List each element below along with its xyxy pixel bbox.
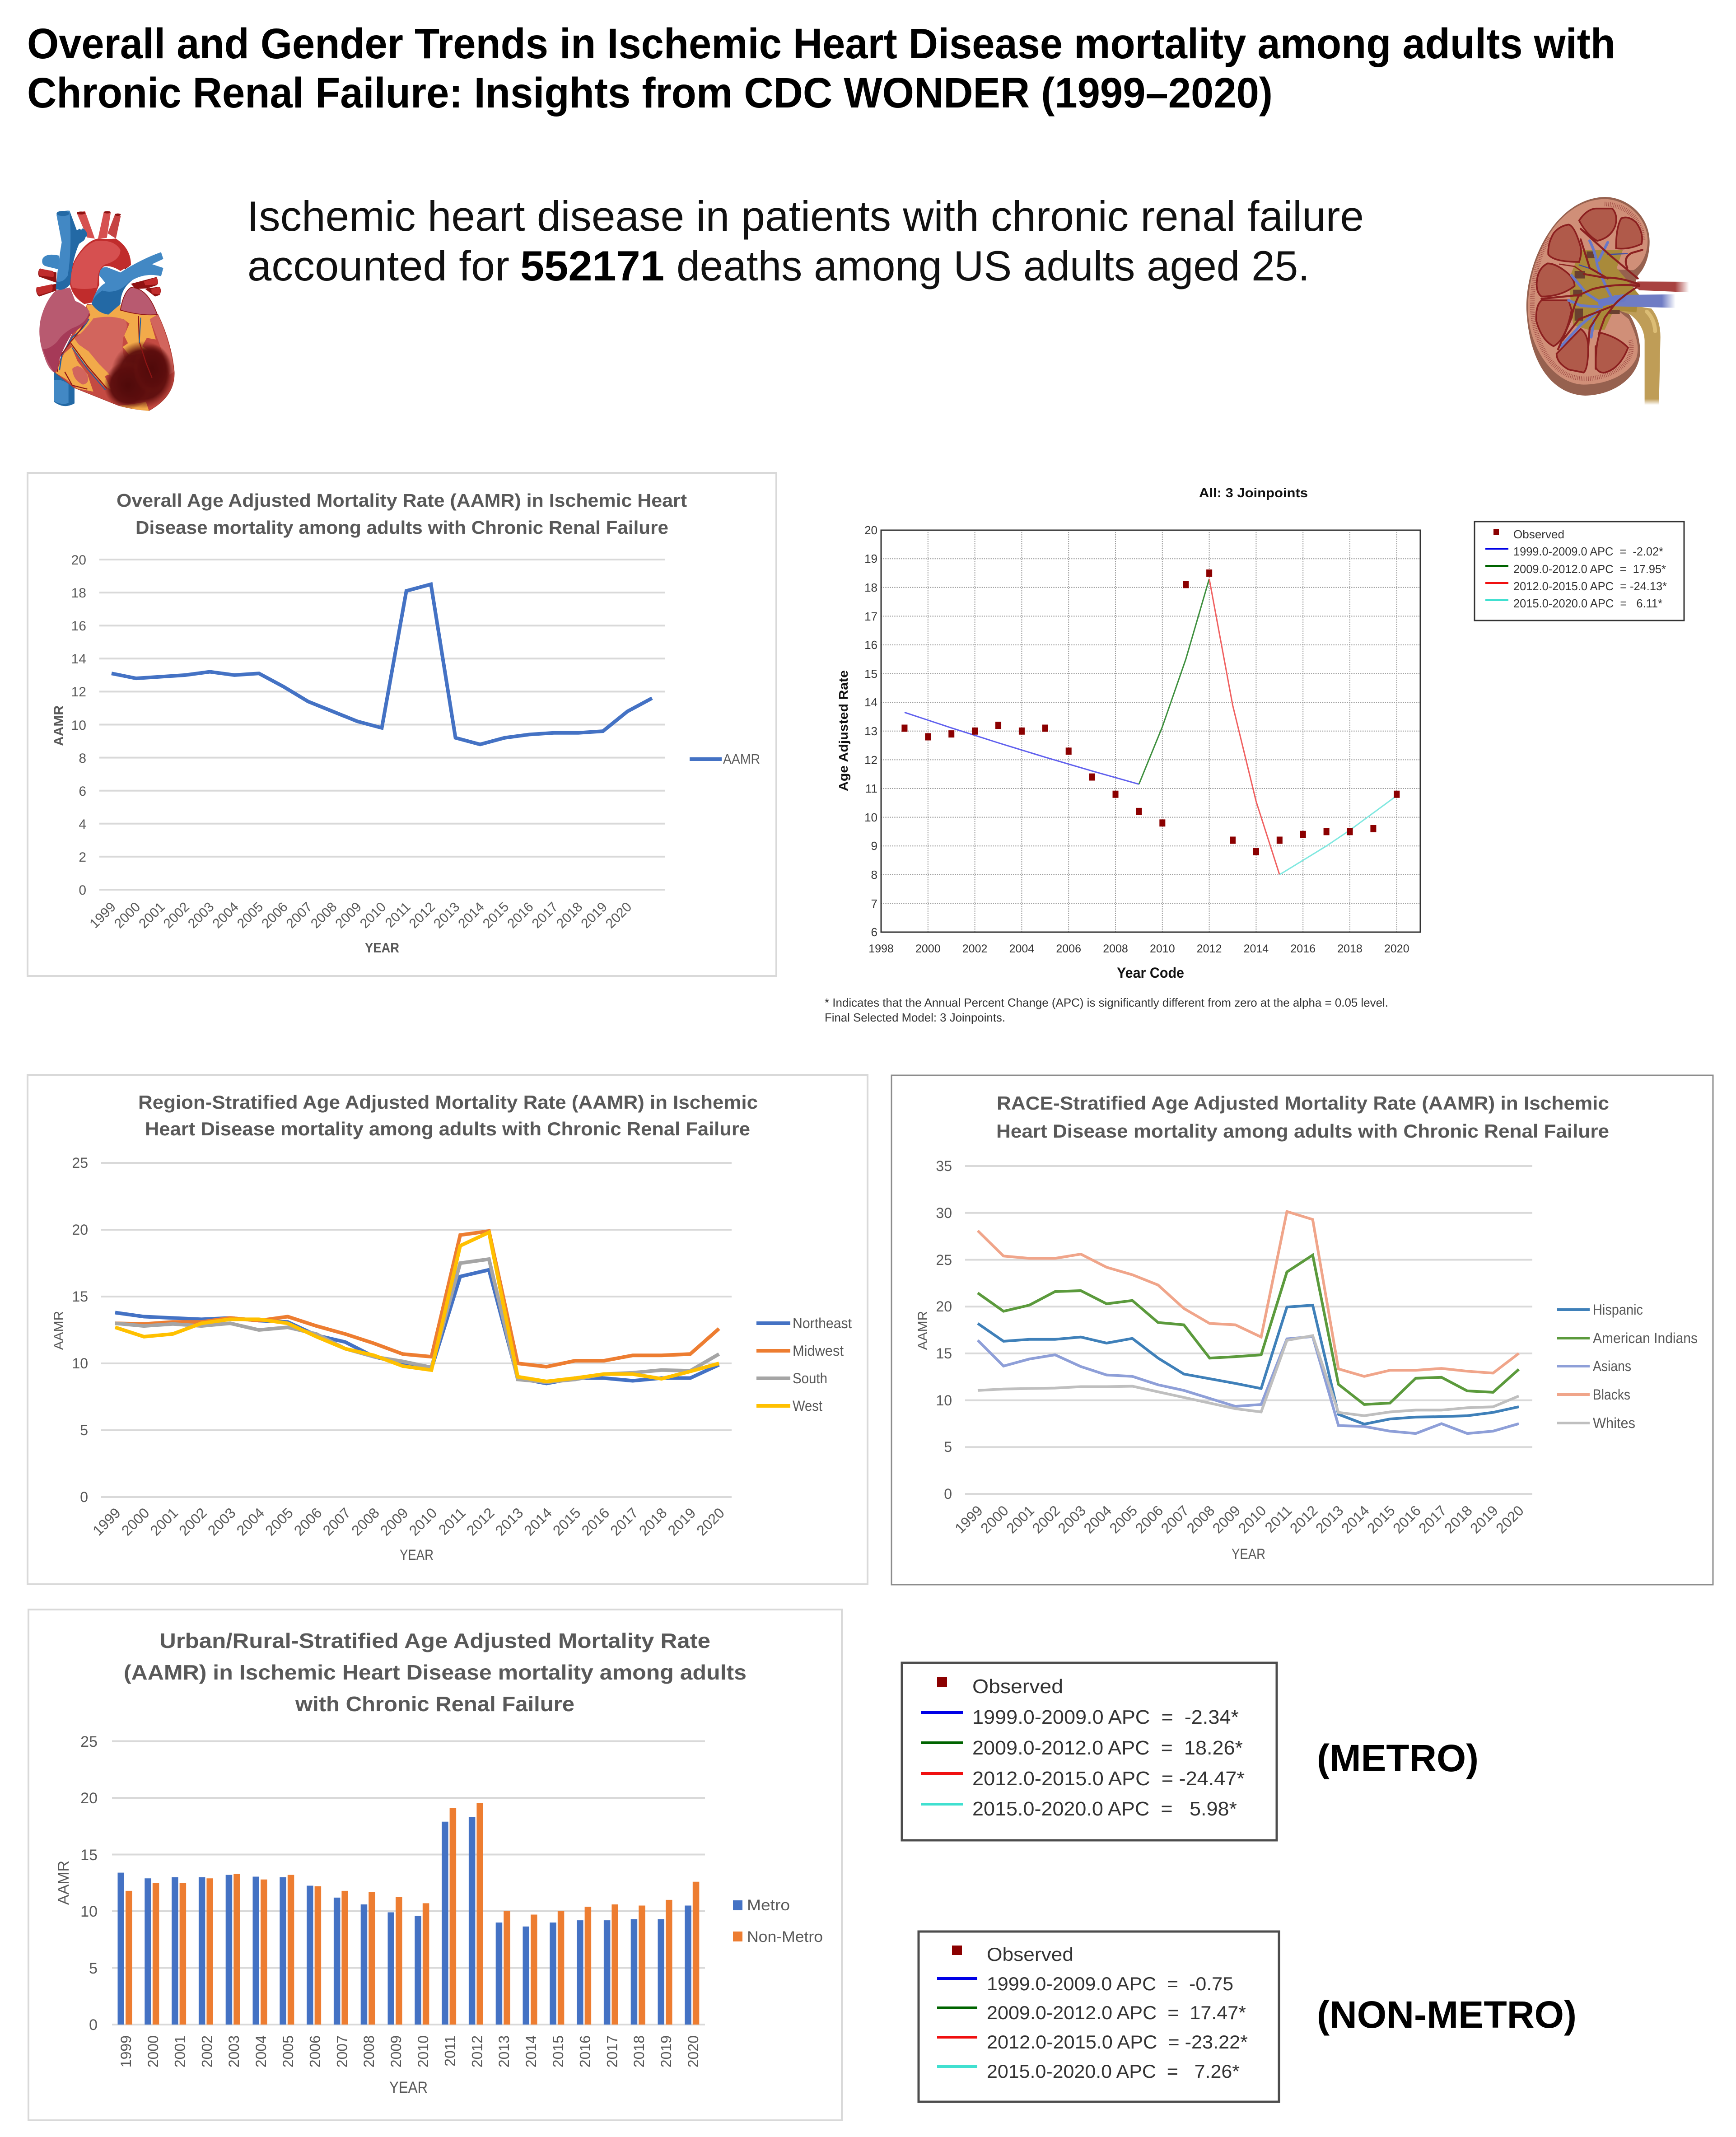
legend: AAMR: [723, 751, 760, 767]
line: AAMR: [112, 584, 652, 744]
panel: race-stratified line chart: [891, 1075, 1713, 1585]
x axis year labels: 1999: [118, 2035, 134, 2067]
icon: kidney cross-section: [1526, 197, 1689, 405]
panel: joinpoint regression chart: [825, 486, 1684, 1024]
x axis title: YEAR: [400, 1547, 434, 1563]
x axis year labels: 2008: [308, 900, 340, 931]
legend: overall APC: [1475, 522, 1684, 621]
x axis year labels: 2001: [136, 900, 168, 931]
y axis labels: 11: [865, 782, 877, 795]
y axis labels: 15: [80, 1847, 98, 1864]
y axis labels: 5: [80, 1422, 88, 1438]
x axis year labels: [118, 2035, 701, 2067]
x axis year labels: [89, 1504, 728, 1539]
x axis year labels: 2011: [383, 900, 414, 931]
x axis year labels: 2006: [259, 900, 291, 931]
x axis year labels: 2005: [280, 2035, 296, 2067]
plot grid: [881, 530, 1420, 932]
y axis title: AAMR: [915, 1311, 930, 1350]
x axis labels: 2004: [1009, 943, 1034, 955]
x axis year labels: 2013: [492, 1504, 526, 1539]
y axis labels: [80, 1733, 98, 2034]
legend: metro APC: Observed: [972, 1675, 1063, 1698]
x axis year labels: 2003: [185, 900, 217, 931]
x axis year labels: 2001: [172, 2035, 188, 2067]
y axis title: AAMR: [55, 1861, 72, 1905]
y axis labels: 6: [871, 925, 877, 939]
x axis year labels: 2007: [320, 1504, 354, 1539]
x axis labels: 2006: [1056, 943, 1081, 955]
legend: South: [793, 1370, 827, 1386]
x axis year labels: 2018: [1441, 1502, 1475, 1536]
x axis year labels: 2004: [253, 2035, 269, 2067]
x axis labels: 2020: [1384, 943, 1409, 955]
grid lines: [112, 1741, 705, 2025]
x axis labels: 2016: [1290, 943, 1316, 955]
chart title: Heart Disease mortality among adults with Chronic Renal Failure: [145, 1118, 750, 1139]
y axis labels: 5: [944, 1439, 952, 1455]
chart title: [117, 490, 687, 538]
chart title: RACE-Stratified Age Adjusted Mortality Rate (AAMR) in Ischemic: [997, 1092, 1609, 1114]
y axis labels: 0: [80, 1489, 88, 1505]
x axis year labels: 2017: [1415, 1502, 1450, 1536]
legend: Blacks: [1593, 1386, 1630, 1403]
y axis labels: 20: [864, 523, 877, 537]
x axis year labels: 2010: [406, 1504, 440, 1539]
x axis year labels: 2001: [1003, 1502, 1037, 1536]
x axis year labels: 1999: [952, 1502, 986, 1536]
x axis year labels: 2015: [550, 2035, 566, 2067]
x axis labels: 2000: [915, 943, 941, 955]
x axis year labels: 2014: [521, 1504, 555, 1539]
footnote: [825, 996, 1388, 1024]
legend: Asians: [1593, 1358, 1631, 1374]
x axis year labels: 2002: [161, 900, 192, 931]
y axis labels: 5: [89, 1960, 98, 1977]
x axis year labels: 2019: [665, 1504, 699, 1539]
lines: Hispanic, American Indians, Asians, Blacks, Whites: [978, 1212, 1519, 1433]
x axis year labels: 2012: [469, 2035, 485, 2067]
x axis year labels: 2020: [603, 900, 635, 931]
x axis year labels: 2011: [435, 1504, 469, 1538]
chart title: [124, 1629, 747, 1716]
summary text block: Ischemic heart disease in patients with chronic renal failure: [247, 192, 1364, 240]
x axis year labels: 2005: [234, 900, 266, 931]
y axis labels: 0: [944, 1486, 952, 1502]
legend: metro APC: 2015.0-2020.0 APC = 5.98*: [972, 1798, 1237, 1820]
y axis labels: 15: [72, 1288, 88, 1305]
x axis year labels: 2003: [205, 1504, 239, 1539]
x axis year labels: 2007: [1158, 1502, 1192, 1536]
x axis title: Year Code: [1117, 965, 1184, 981]
y axis labels: [936, 1158, 952, 1502]
x axis year labels: 2004: [233, 1504, 267, 1539]
grid lines: [101, 1163, 732, 1497]
y axis labels: 14: [864, 695, 877, 709]
x axis year labels: 2014: [455, 900, 487, 931]
x axis year labels: 2016: [504, 900, 537, 931]
lines: Northeast, Midwest, South, West: [115, 1231, 719, 1383]
legend: overall APC: 2012.0-2015.0 APC = -24.13*: [1513, 579, 1667, 593]
x axis year labels: 2013: [496, 2035, 512, 2067]
y axis title: AAMR: [51, 1311, 66, 1350]
chart title: Overall Age Adjusted Mortality Rate (AAMR) in Ischemic Heart: [117, 490, 687, 511]
x axis year labels: 2000: [118, 1504, 153, 1539]
y axis labels: 12: [864, 753, 877, 767]
y axis labels: 8: [871, 868, 877, 882]
bars: Metro and Non-Metro: [117, 1803, 699, 2025]
y axis labels: 9: [871, 839, 877, 853]
x axis year labels: 2009: [377, 1504, 411, 1539]
x axis year labels: 2001: [147, 1504, 181, 1539]
legend: Northeast: [793, 1315, 852, 1331]
y axis labels: 30: [936, 1205, 952, 1221]
x axis year labels: 1999: [89, 1504, 124, 1539]
x axis year labels: 2006: [307, 2035, 323, 2067]
y axis labels: 16: [71, 619, 86, 634]
title: Overall and Gender Trends in Ischemic Heart Disease mortality among adults with: [27, 20, 1615, 68]
y axis labels: 16: [864, 638, 877, 652]
x axis year labels: 2016: [1390, 1502, 1424, 1536]
x axis year labels: 2009: [332, 900, 364, 931]
x axis year labels: 2012: [1287, 1502, 1321, 1536]
legend: Non-Metro: [747, 1928, 823, 1946]
x axis title: YEAR: [389, 2079, 428, 2096]
legend: Midwest: [793, 1343, 844, 1359]
x axis year labels: 2000: [977, 1502, 1012, 1536]
x axis year labels: 2017: [604, 2035, 620, 2067]
x axis year labels: 2017: [607, 1504, 641, 1539]
x axis year labels: 1999: [87, 900, 119, 931]
x axis year labels: 2018: [554, 900, 586, 931]
legend: Whites: [1593, 1415, 1635, 1431]
legend: overall APC: Observed: [1513, 527, 1564, 541]
y axis labels: 12: [71, 685, 86, 700]
y axis labels: 15: [936, 1345, 952, 1362]
x axis year labels: 2018: [631, 2035, 647, 2067]
footnote: * Indicates that the Annual Percent Change (APC) is significantly different from zero at the alpha = 0.05 level.: [825, 996, 1388, 1009]
panel: overall AAMR line chart: [28, 473, 776, 976]
chart title: Disease mortality among adults with Chronic Renal Failure: [135, 517, 668, 538]
x axis year labels: 2000: [112, 900, 143, 931]
x axis year labels: 2017: [529, 900, 561, 931]
panel: region-stratified line chart: [28, 1075, 868, 1584]
x axis labels: 2018: [1337, 943, 1363, 955]
x axis year labels: 2014: [523, 2035, 539, 2067]
legend: non-metro APC: 2015.0-2020.0 APC = 7.26*: [987, 2061, 1240, 2082]
y axis labels: 20: [80, 1790, 98, 1807]
legend: overall APC: 2009.0-2012.0 APC = 17.95*: [1513, 562, 1666, 576]
x axis year labels: 2009: [388, 2035, 404, 2067]
x axis year labels: 2009: [1209, 1502, 1243, 1536]
x axis year labels: 2013: [431, 900, 463, 931]
legend: Hispanic: [1593, 1302, 1643, 1318]
chart title: with Chronic Renal Failure: [295, 1692, 574, 1716]
legend: non-metro APC: 2009.0-2012.0 APC = 17.47*: [987, 2002, 1246, 2023]
y axis labels: 6: [79, 784, 86, 799]
legend: [756, 1315, 852, 1414]
y axis labels: [71, 553, 86, 898]
legend: West: [793, 1398, 822, 1414]
chart title: [996, 1092, 1609, 1142]
y axis labels: 25: [80, 1733, 98, 1750]
x axis year labels: 2005: [262, 1504, 296, 1539]
y axis labels: 15: [864, 667, 877, 681]
x axis year labels: 2008: [361, 2035, 377, 2067]
grid lines: [99, 560, 665, 890]
x axis year labels: 2008: [1184, 1502, 1218, 1536]
x axis title: YEAR: [365, 940, 399, 956]
x axis year labels: 2006: [291, 1504, 325, 1539]
label: NON-METRO: (NON-METRO): [1317, 1993, 1577, 2036]
x axis labels: 1998: [868, 943, 894, 955]
y axis labels: 10: [936, 1392, 952, 1409]
y axis labels: 18: [71, 586, 86, 601]
chart title: [138, 1092, 758, 1139]
x axis year labels: 2016: [579, 1504, 612, 1539]
x axis year labels: 2004: [1080, 1502, 1115, 1536]
chart title: Heart Disease mortality among adults with Chronic Renal Failure: [996, 1120, 1609, 1142]
summary text block: accounted for: [247, 242, 509, 289]
x axis year labels: 2020: [693, 1504, 728, 1539]
y axis labels: 19: [864, 552, 877, 565]
x axis labels: 2008: [1103, 943, 1128, 955]
legend: American Indians: [1593, 1330, 1698, 1346]
y axis labels: 4: [79, 817, 86, 832]
y axis title: AAMR: [51, 705, 66, 746]
x axis year labels: 2005: [1106, 1502, 1140, 1536]
x axis year labels: 2015: [1364, 1502, 1398, 1536]
x axis year labels: 2019: [658, 2035, 674, 2067]
y axis labels: 25: [936, 1252, 952, 1268]
icon: heart with infarct: [36, 210, 175, 411]
x axis year labels: 2010: [1235, 1502, 1269, 1536]
title: [27, 20, 1615, 117]
x axis year labels: 2003: [1055, 1502, 1089, 1536]
y axis labels: 13: [864, 724, 877, 738]
y axis title: Age Adjusted Rate: [836, 670, 850, 791]
x axis year labels: 2012: [463, 1504, 498, 1539]
grid lines: [965, 1166, 1532, 1494]
y axis labels: 20: [936, 1298, 952, 1315]
legend: metro APC: 2009.0-2012.0 APC = 18.26*: [972, 1737, 1243, 1759]
y axis labels: 17: [864, 610, 877, 623]
summary text block: deaths among US adults aged 25.: [677, 242, 1310, 289]
y axis labels: 0: [89, 2016, 98, 2034]
chart title: All: 3 Joinpoints: [1199, 486, 1308, 500]
x axis year labels: 2013: [1312, 1502, 1347, 1536]
y axis labels: 35: [936, 1158, 952, 1174]
y axis labels: 0: [79, 883, 86, 898]
x axis labels: 2010: [1150, 943, 1175, 955]
x axis year labels: 2011: [1261, 1502, 1295, 1536]
legend: Metro: [747, 1897, 790, 1914]
legend: metro APC: 1999.0-2009.0 APC = -2.34*: [972, 1706, 1239, 1728]
x axis year labels: 2007: [284, 900, 315, 931]
x axis year labels: 2010: [357, 900, 389, 931]
x axis year labels: 2019: [578, 900, 610, 931]
legend: metro APC: [902, 1663, 1277, 1840]
label: METRO: (METRO): [1317, 1737, 1479, 1779]
x axis year labels: 2002: [199, 2035, 215, 2067]
summary text block: 552171: [520, 242, 664, 289]
x axis year labels: 2020: [1493, 1502, 1527, 1536]
y axis labels: 25: [72, 1155, 88, 1171]
legend: non-metro APC: Observed: [987, 1944, 1073, 1965]
legend: non-metro APC: 2012.0-2015.0 APC = -23.22*: [987, 2031, 1248, 2053]
x axis year labels: 2015: [480, 900, 512, 931]
y axis labels: 20: [71, 553, 86, 568]
title: Chronic Renal Failure: Insights from CDC WONDER (1999–2020): [27, 69, 1273, 117]
chart title: Region-Stratified Age Adjusted Mortality Rate (AAMR) in Ischemic: [138, 1092, 758, 1113]
chart title: (AAMR) in Ischemic Heart Disease mortality among adults: [124, 1661, 747, 1684]
plot frame: [881, 530, 1420, 932]
legend: overall APC: 2015.0-2020.0 APC = 6.11*: [1513, 597, 1662, 610]
y axis labels: 10: [80, 1903, 98, 1920]
x axis year labels: 2007: [334, 2035, 350, 2067]
y axis labels: [72, 1155, 88, 1505]
x axis year labels: 2018: [636, 1504, 670, 1539]
x axis labels: 2012: [1197, 943, 1222, 955]
x axis labels: [868, 943, 1409, 955]
x axis year labels: 2015: [550, 1504, 584, 1539]
y axis labels: 20: [72, 1222, 88, 1238]
x axis year labels: 2003: [226, 2035, 242, 2067]
legend: overall APC: 1999.0-2009.0 APC = -2.02*: [1513, 545, 1663, 558]
legend: non-metro APC: [919, 1932, 1279, 2102]
x axis year labels: 2002: [1029, 1502, 1063, 1536]
legend: [733, 1897, 823, 1946]
y axis labels: 8: [79, 751, 86, 766]
y axis labels: 2: [79, 850, 86, 865]
footnote: Final Selected Model: 3 Joinpoints.: [825, 1011, 1005, 1024]
x axis year labels: 2011: [442, 2035, 458, 2067]
summary text block: [247, 192, 1364, 289]
x axis year labels: 2012: [406, 900, 438, 931]
y axis labels: 14: [71, 652, 86, 667]
panel: urban/rural bar chart: [28, 1610, 842, 2120]
x axis year labels: 2019: [1467, 1502, 1501, 1536]
x axis labels: 2014: [1244, 943, 1269, 955]
x axis year labels: 2008: [348, 1504, 383, 1539]
y axis labels: [864, 523, 877, 939]
x axis title: YEAR: [1232, 1546, 1265, 1562]
legend: [1557, 1302, 1698, 1431]
x axis year labels: 2004: [210, 900, 242, 931]
legend: non-metro APC: 1999.0-2009.0 APC = -0.75: [987, 1973, 1233, 1994]
legend: metro APC: 2012.0-2015.0 APC = -24.47*: [972, 1768, 1245, 1790]
y axis labels: 18: [864, 581, 877, 594]
y axis labels: 10: [864, 811, 877, 824]
x axis year labels: 2016: [577, 2035, 593, 2067]
x axis year labels: [952, 1502, 1527, 1536]
x axis year labels: 2000: [145, 2035, 161, 2067]
x axis year labels: 2014: [1338, 1502, 1372, 1536]
x axis year labels: [87, 900, 635, 931]
x axis year labels: 2010: [415, 2035, 431, 2067]
x axis year labels: 2020: [685, 2035, 701, 2067]
joinpoint trend lines and observed points: [902, 570, 1399, 875]
x axis labels: 2002: [962, 943, 987, 955]
x axis year labels: 2002: [176, 1504, 210, 1539]
chart title: Urban/Rural-Stratified Age Adjusted Mortality Rate: [159, 1629, 710, 1652]
y axis labels: 10: [72, 1355, 88, 1372]
y axis labels: 10: [71, 718, 86, 733]
x axis year labels: 2006: [1132, 1502, 1166, 1536]
y axis labels: 7: [871, 897, 877, 910]
